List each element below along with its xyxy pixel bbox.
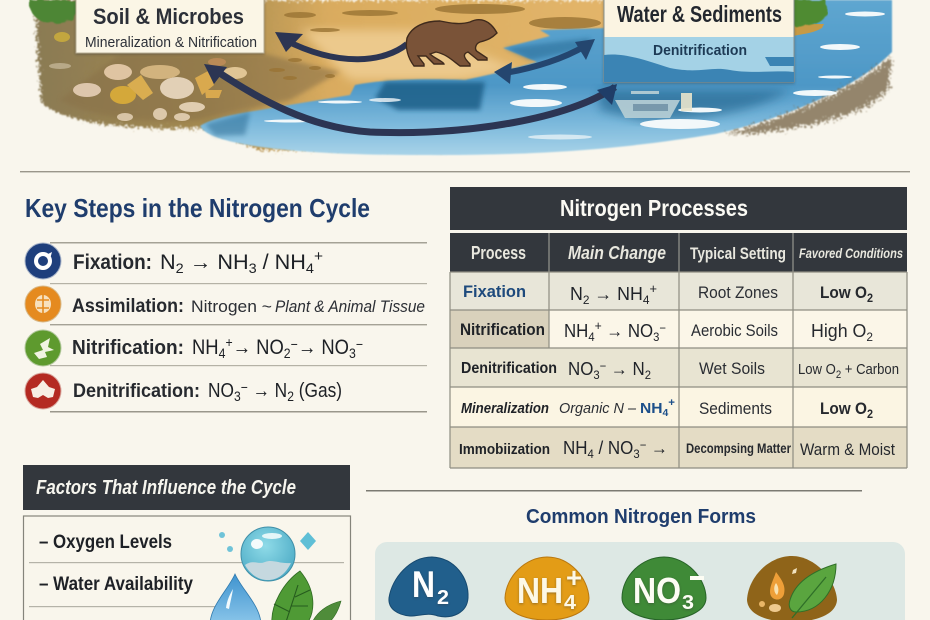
row: nitrification — [460, 318, 873, 344]
form: NO3- — [622, 557, 706, 620]
pebbles — [49, 32, 247, 121]
row: fixation: Root Zones — [698, 283, 778, 302]
row: fixation: + — [649, 281, 657, 296]
row: nitrification: NH — [564, 321, 590, 341]
form: NO3-: NO — [633, 570, 681, 611]
step: nitrification: − — [291, 336, 298, 352]
table title: Nitrogen Processes — [560, 195, 748, 221]
row: immobilization: − — [640, 438, 646, 452]
bush: left — [30, 0, 78, 23]
step: nitrification: → NO — [298, 336, 349, 359]
row: denitrification: − — [600, 359, 606, 373]
table header row: Typical Setting — [690, 244, 786, 263]
panel: key steps list — [25, 242, 427, 412]
icon: fixation — [25, 243, 61, 279]
step: denitrification — [25, 373, 342, 409]
step: nitrification: Nitrification: — [72, 337, 184, 359]
soil ground — [36, 0, 620, 150]
step: denitrification: 3 — [234, 388, 241, 404]
water highlights — [264, 12, 885, 140]
arrow: double headed between shore and water — [494, 39, 595, 84]
step: nitrification: − — [356, 336, 363, 352]
divider — [366, 490, 862, 492]
factors box — [24, 516, 350, 620]
row: mineralization: 2 — [867, 407, 873, 421]
row: immobilization — [459, 438, 895, 461]
row: nitrification: + — [595, 318, 602, 333]
icon: water drop — [210, 574, 261, 620]
label: soil and microbes: Soil & Microbes — [93, 4, 244, 29]
row: nitrification: 2 — [866, 330, 873, 344]
dark pond patches — [205, 38, 790, 136]
row: nitrification: − — [659, 321, 666, 335]
row: immobilization: Decompsing Matter — [686, 440, 791, 456]
panel: nitrogen processes table — [450, 187, 907, 468]
row: mineralization: Mineralization — [461, 400, 549, 417]
divider — [20, 171, 910, 172]
row: immobilization: Immobiization — [459, 441, 550, 458]
step: fixation: Fixation: — [73, 251, 152, 274]
row: mineralization: Low O — [820, 399, 872, 418]
form: NH4+ — [505, 557, 589, 620]
row: nitrification: Nitrification — [460, 320, 545, 339]
row: denitrification — [461, 359, 899, 382]
table header row: Process — [471, 243, 526, 263]
step: fixation: / NH — [257, 251, 306, 274]
row: immobilization: / NO — [594, 438, 633, 458]
icon: assimilation — [25, 286, 61, 322]
animal — [406, 20, 497, 66]
row: mineralization — [461, 397, 873, 421]
step: denitrification: → N — [248, 380, 287, 402]
label: soil and microbes — [76, 0, 264, 53]
step: nitrification: 4 — [219, 345, 226, 361]
dirt flecks — [269, 4, 601, 80]
water body — [200, 0, 892, 155]
form: N2: N — [412, 564, 435, 605]
table title — [450, 187, 907, 230]
row: denitrification: → N — [606, 359, 645, 379]
row: mineralization: 4 — [663, 408, 669, 419]
icon: oxygen bubble — [219, 527, 316, 581]
step: denitrification: (Gas) — [294, 380, 342, 402]
row: denitrification: 2 — [836, 369, 841, 381]
row: fixation: 2 — [867, 291, 873, 305]
row: immobilization: 3 — [633, 447, 640, 461]
row: immobilization: NH — [563, 438, 589, 458]
row: denitrification: 2 — [645, 368, 651, 382]
step: nitrification: → NO — [233, 336, 284, 359]
row: denitrification: NO — [568, 359, 595, 379]
step: fixation: 3 — [249, 260, 257, 276]
form: NO3-: 3 — [682, 592, 694, 614]
label: water and sediments: Water & Sediments — [617, 1, 782, 27]
step: assimilation: Nitrogen ~ — [191, 297, 272, 316]
form: NH4+: + — [566, 562, 582, 593]
row: nitrification: High O — [811, 321, 867, 341]
icon: nitrification — [25, 330, 61, 366]
row: fixation — [463, 281, 873, 307]
form: organic nitrogen — [747, 556, 837, 620]
step: assimilation: Assimilation: — [72, 296, 184, 317]
row: fixation: Fixation — [463, 282, 526, 301]
row: fixation: Low O — [820, 283, 872, 302]
step: fixation: 2 — [176, 260, 184, 276]
table header row: Favored Conditions — [799, 245, 903, 261]
panel: common nitrogen forms — [375, 542, 905, 620]
row: fixation: 2 — [583, 293, 590, 307]
panel: factors that influence the cycle — [23, 465, 350, 620]
form: N2: 2 — [437, 587, 449, 609]
row: immobilization: 4 — [588, 447, 594, 461]
row: denitrification: Wet Soils — [699, 359, 765, 378]
step: fixation: → NH — [184, 251, 249, 274]
step: nitrification: 2 — [284, 345, 291, 361]
heading: common nitrogen forms: Common Nitrogen Forms — [526, 506, 756, 528]
icon: leaf — [272, 571, 341, 620]
arrow: animal to soil label — [275, 32, 407, 59]
row: denitrification: Denitrification — [461, 360, 557, 377]
row: nitrification: Aerobic Soils — [691, 321, 778, 340]
factors heading — [23, 465, 350, 510]
factors heading: Factors That Influence the Cycle — [36, 477, 296, 499]
soil dark band — [60, 54, 340, 121]
label: water and sediments: Denitrification — [653, 42, 747, 59]
form: N2 — [389, 557, 468, 617]
row: mineralization: Organic N – — [559, 400, 637, 417]
heading: key steps: Key Steps in the Nitrogen Cycle — [25, 193, 370, 223]
step: fixation: + — [314, 248, 323, 265]
hero illustration: soil and water landscape — [30, 0, 892, 155]
row: mineralization: Sediments — [699, 399, 772, 418]
step: denitrification: 2 — [287, 388, 294, 404]
row: denitrification: Low O — [798, 361, 841, 378]
row: nitrification: → NO — [602, 321, 653, 341]
step: fixation: 4 — [306, 260, 314, 276]
factor: water availability: – Water Availability — [39, 574, 193, 595]
row: nitrification: 3 — [653, 330, 660, 344]
step: denitrification: Denitrification: — [73, 381, 200, 402]
step: denitrification: NO — [208, 380, 238, 402]
row: mineralization: + — [668, 397, 675, 409]
step: denitrification: − — [241, 379, 248, 395]
right dark soil shadow — [725, 56, 892, 134]
sand highlights — [300, 30, 520, 80]
step: assimilation — [25, 286, 425, 322]
factor: oxygen levels: – Oxygen Levels — [39, 532, 172, 553]
table body background — [450, 272, 907, 468]
step: nitrification: + — [225, 334, 233, 350]
step: fixation: N — [160, 251, 175, 274]
step: assimilation: Plant & Animal Tissue — [275, 297, 425, 316]
row: fixation: → NH — [589, 284, 643, 304]
step: nitrification: 3 — [349, 345, 356, 361]
row: mineralization: NH — [640, 400, 662, 417]
arrow: water label to soil — [204, 64, 617, 133]
table header row — [450, 233, 907, 272]
row: fixation: N — [570, 284, 583, 304]
label: soil and microbes: Mineralization & Nitrification — [85, 35, 257, 51]
table header row: Main Change — [568, 243, 666, 263]
step: nitrification: NH — [192, 336, 222, 359]
row: nitrification: 4 — [588, 330, 595, 344]
row: immobilization: Warm & Moist — [800, 440, 895, 459]
form: NH4+: NH — [517, 570, 563, 611]
icon: denitrification — [25, 373, 61, 409]
label: water and sediments — [604, 0, 794, 82]
row: denitrification: + Carbon — [841, 361, 899, 378]
form: NH4+: 4 — [564, 592, 577, 614]
step: fixation — [25, 243, 323, 279]
island with bush — [794, 0, 826, 36]
row: immobilization: → — [646, 438, 668, 458]
boat — [615, 91, 692, 118]
row: denitrification: 3 — [593, 368, 600, 382]
step: nitrification — [25, 330, 363, 366]
row: fixation: 4 — [643, 293, 650, 307]
